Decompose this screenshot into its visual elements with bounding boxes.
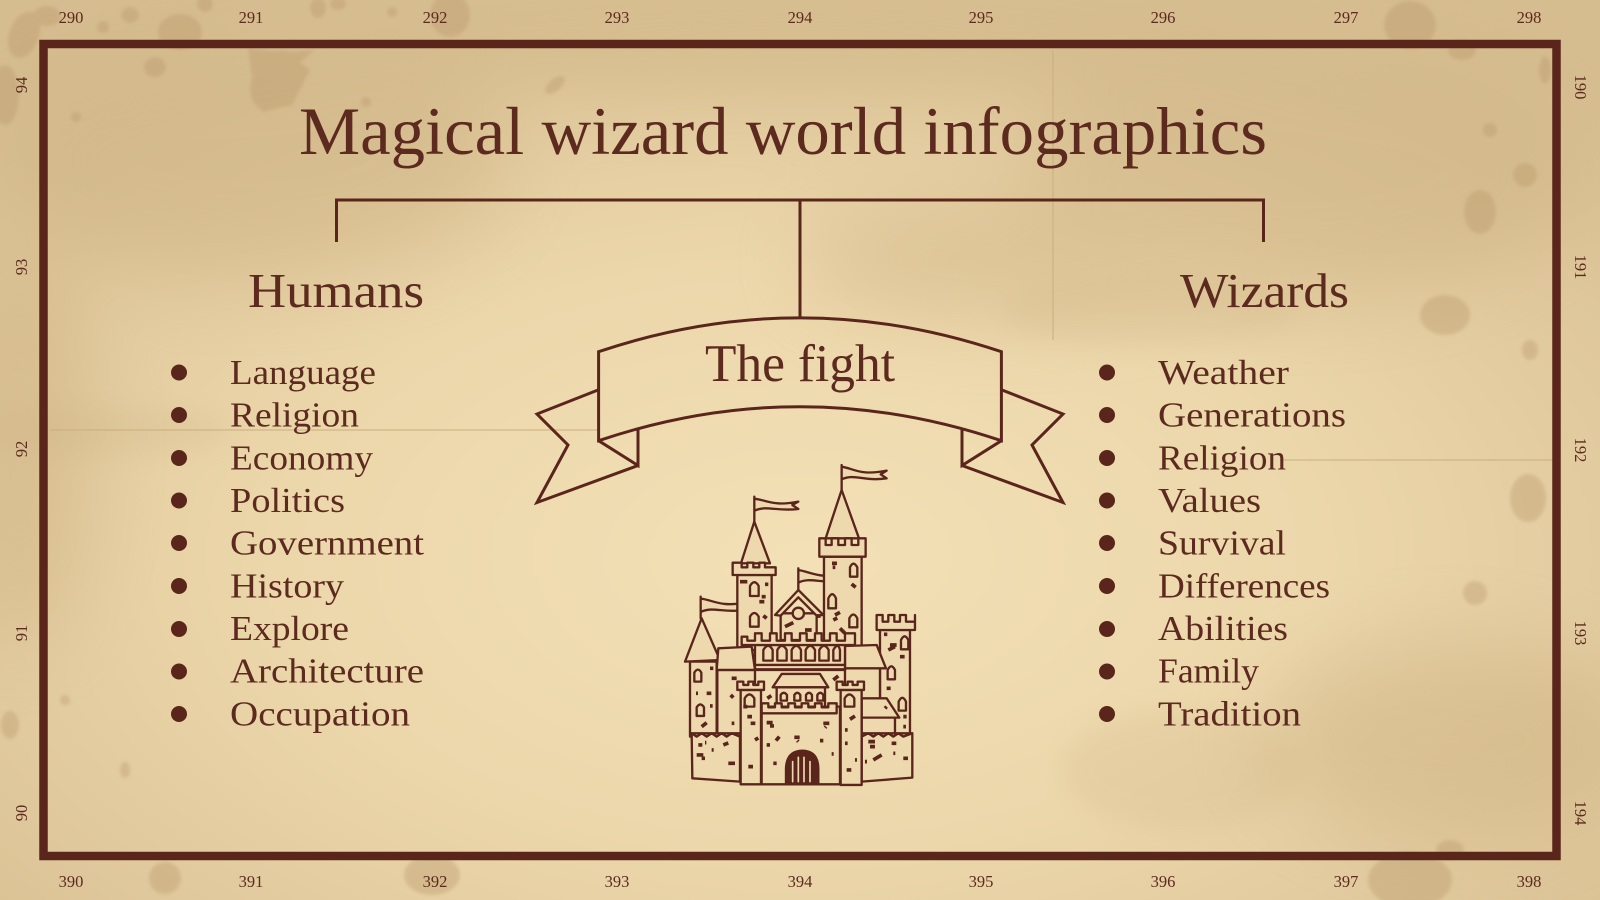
- right axis labels: 190: [1571, 75, 1590, 99]
- list: Humans: [171, 353, 424, 734]
- list: Wizards: Generations: [1158, 396, 1346, 434]
- list: Wizards: Differences: [1158, 566, 1330, 606]
- list: Wizards: Survival: [1158, 524, 1286, 562]
- top axis labels: [59, 8, 1541, 27]
- right axis labels: [1571, 75, 1590, 825]
- banner: [537, 318, 1063, 502]
- bottom axis labels: 396: [1151, 872, 1175, 891]
- list: Humans: Government: [230, 524, 424, 562]
- banner label: The fight: [705, 335, 895, 393]
- heading: Wizards: Wizards: [1180, 263, 1349, 318]
- castle door: [786, 751, 818, 783]
- list: Humans: Occupation: [230, 694, 410, 734]
- right axis labels: 191: [1571, 255, 1590, 279]
- list: Humans: Religion: [230, 396, 359, 434]
- gallery and roofs: [717, 633, 886, 737]
- bottom axis labels: 390: [59, 872, 83, 891]
- flags: [701, 465, 887, 618]
- list: Wizards: Religion: [1158, 438, 1286, 478]
- top axis labels: 294: [788, 8, 812, 27]
- list: Humans: Economy: [230, 438, 374, 478]
- connector lines: [336, 200, 1264, 318]
- top axis labels: 298: [1517, 8, 1541, 27]
- castle windows: [694, 564, 908, 716]
- top axis labels: 296: [1151, 8, 1175, 27]
- top axis labels: 292: [423, 8, 447, 27]
- bottom axis labels: 393: [605, 872, 629, 891]
- top axis labels: 290: [59, 8, 83, 27]
- list: Wizards: Weather: [1158, 353, 1289, 392]
- bottom axis labels: 394: [788, 872, 812, 891]
- rear towers: [685, 490, 915, 737]
- list: Humans: Architecture: [230, 652, 424, 690]
- castle bricks: [696, 563, 908, 770]
- list: Humans: History: [230, 566, 345, 606]
- top axis labels: 295: [969, 8, 993, 27]
- bottom axis labels: 391: [239, 872, 263, 891]
- right axis labels: 193: [1571, 621, 1590, 645]
- bottom axis labels: 397: [1334, 872, 1358, 891]
- list: Wizards: Values: [1158, 481, 1261, 520]
- list: Humans: Language: [230, 353, 376, 392]
- top axis labels: 293: [605, 8, 629, 27]
- walls and lower roof: [692, 674, 912, 785]
- list: Wizards: Tradition: [1158, 694, 1301, 734]
- list: Wizards: Abilities: [1158, 609, 1288, 648]
- bottom axis labels: 398: [1517, 872, 1541, 891]
- left axis labels: 90: [12, 805, 31, 821]
- left axis labels: [12, 77, 31, 821]
- title: Magical wizard world infographics: [299, 93, 1267, 169]
- heading: Humans: Humans: [248, 263, 424, 318]
- bottom axis labels: 395: [969, 872, 993, 891]
- right axis labels: 194: [1571, 801, 1590, 825]
- icon: castle: [685, 465, 915, 785]
- bottom axis labels: 392: [423, 872, 447, 891]
- list: Humans: Explore: [230, 609, 349, 648]
- list: Humans: Politics: [230, 481, 345, 520]
- left axis labels: 94: [12, 77, 31, 93]
- list: Wizards: Family: [1158, 652, 1259, 690]
- list: Wizards: [1099, 353, 1346, 734]
- left axis labels: 93: [12, 259, 31, 275]
- right axis labels: 192: [1571, 438, 1590, 462]
- left axis labels: 91: [12, 625, 31, 641]
- top axis labels: 297: [1334, 8, 1358, 27]
- left axis labels: 92: [12, 441, 31, 457]
- top axis labels: 291: [239, 8, 263, 27]
- bottom axis labels: [59, 872, 1541, 891]
